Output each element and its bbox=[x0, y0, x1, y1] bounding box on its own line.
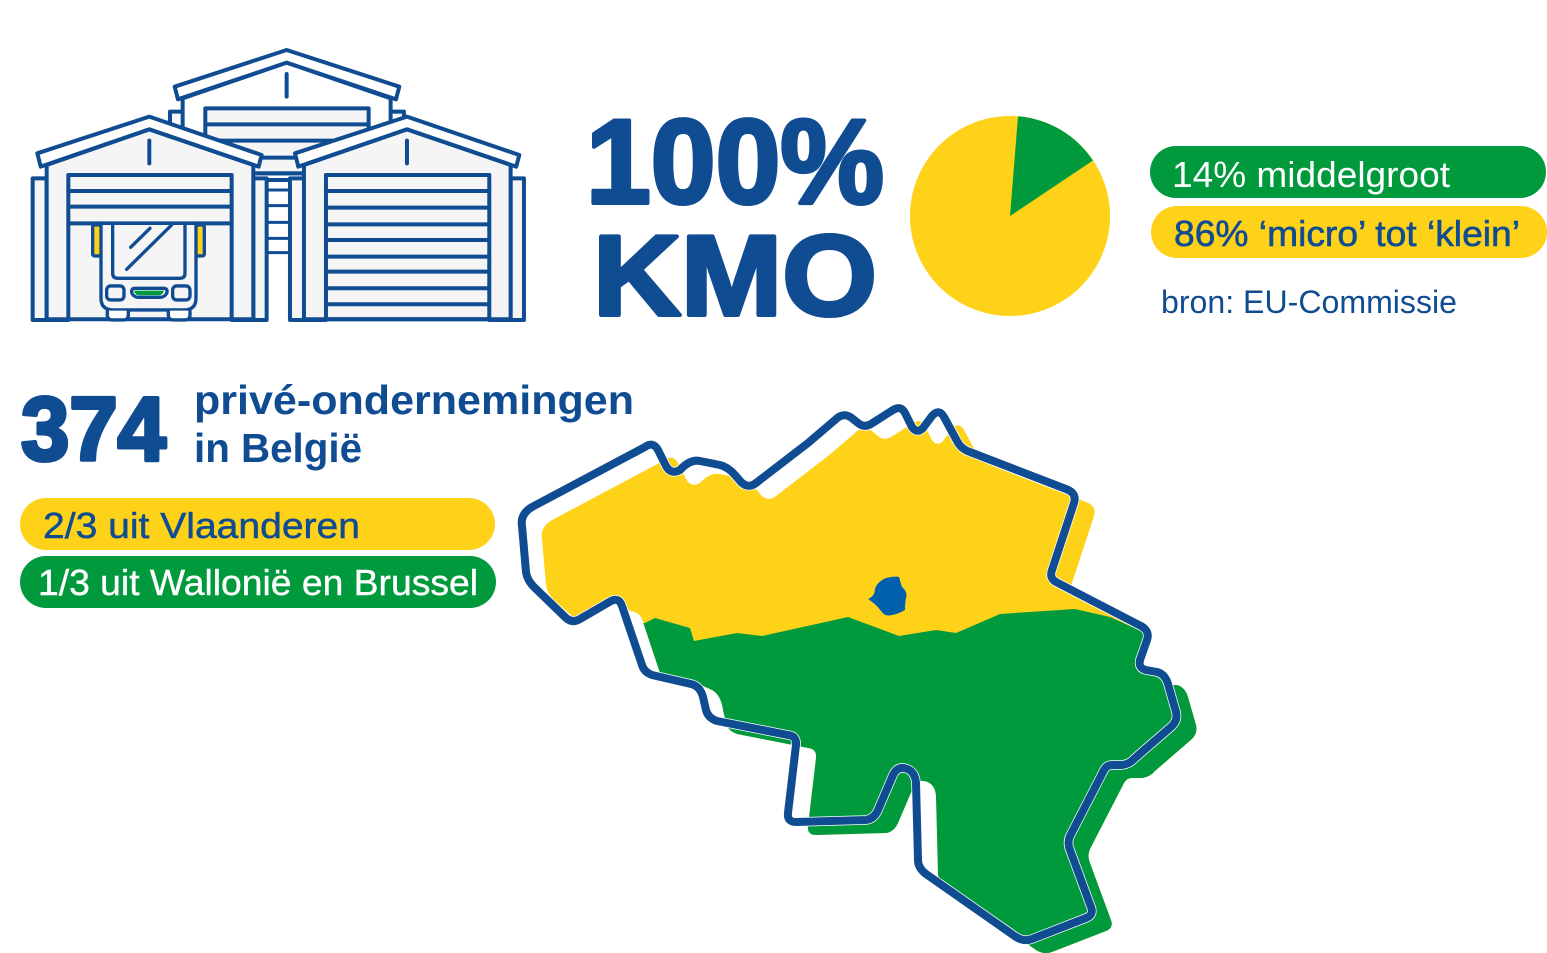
left garage with bus bbox=[33, 117, 267, 320]
icon: bus bbox=[93, 225, 204, 320]
map fill: Flanders in yellow bbox=[542, 421, 1196, 953]
heading: 100% KMO bbox=[586, 95, 884, 340]
map: offset country outline bbox=[522, 408, 1176, 940]
legend: 14% middelgroot: 14% middelgroot bbox=[1172, 154, 1450, 195]
icon: garages with bus bbox=[33, 50, 524, 320]
heading: 100% KMO: 100% bbox=[586, 95, 884, 229]
pill: 2/3 uit Vlaanderen: 2/3 uit Vlaanderen bbox=[43, 505, 360, 546]
legend: 86% micro tot klein: 86% ‘micro’ tot ‘klein’ bbox=[1174, 213, 1520, 254]
subheading: private companies in Belgium: privé-ondernemingen bbox=[194, 377, 634, 423]
pill: 1/3 uit Wallonië en Brussel: 1/3 uit Wallonië en Brussel bbox=[38, 562, 478, 603]
legend: 86% micro tot klein bbox=[1151, 206, 1547, 258]
map of Belgium bbox=[522, 408, 1196, 953]
map: Brussels bbox=[868, 577, 906, 616]
heading: 100% KMO: KMO bbox=[593, 213, 877, 340]
source note: bron: EU-Commissie bbox=[1161, 284, 1457, 320]
pill: 2/3 uit Vlaanderen bbox=[20, 498, 495, 550]
subheading: private companies in Belgium bbox=[194, 377, 634, 471]
legend: 14% middelgroot bbox=[1150, 146, 1546, 198]
back garage bbox=[170, 50, 404, 253]
big number: 374: 374 bbox=[21, 380, 166, 480]
map fill: Wallonia in green bbox=[643, 609, 1196, 953]
subheading: private companies in Belgium: in België bbox=[194, 425, 362, 471]
pie chart: company size bbox=[910, 116, 1110, 316]
right garage bbox=[290, 117, 524, 320]
